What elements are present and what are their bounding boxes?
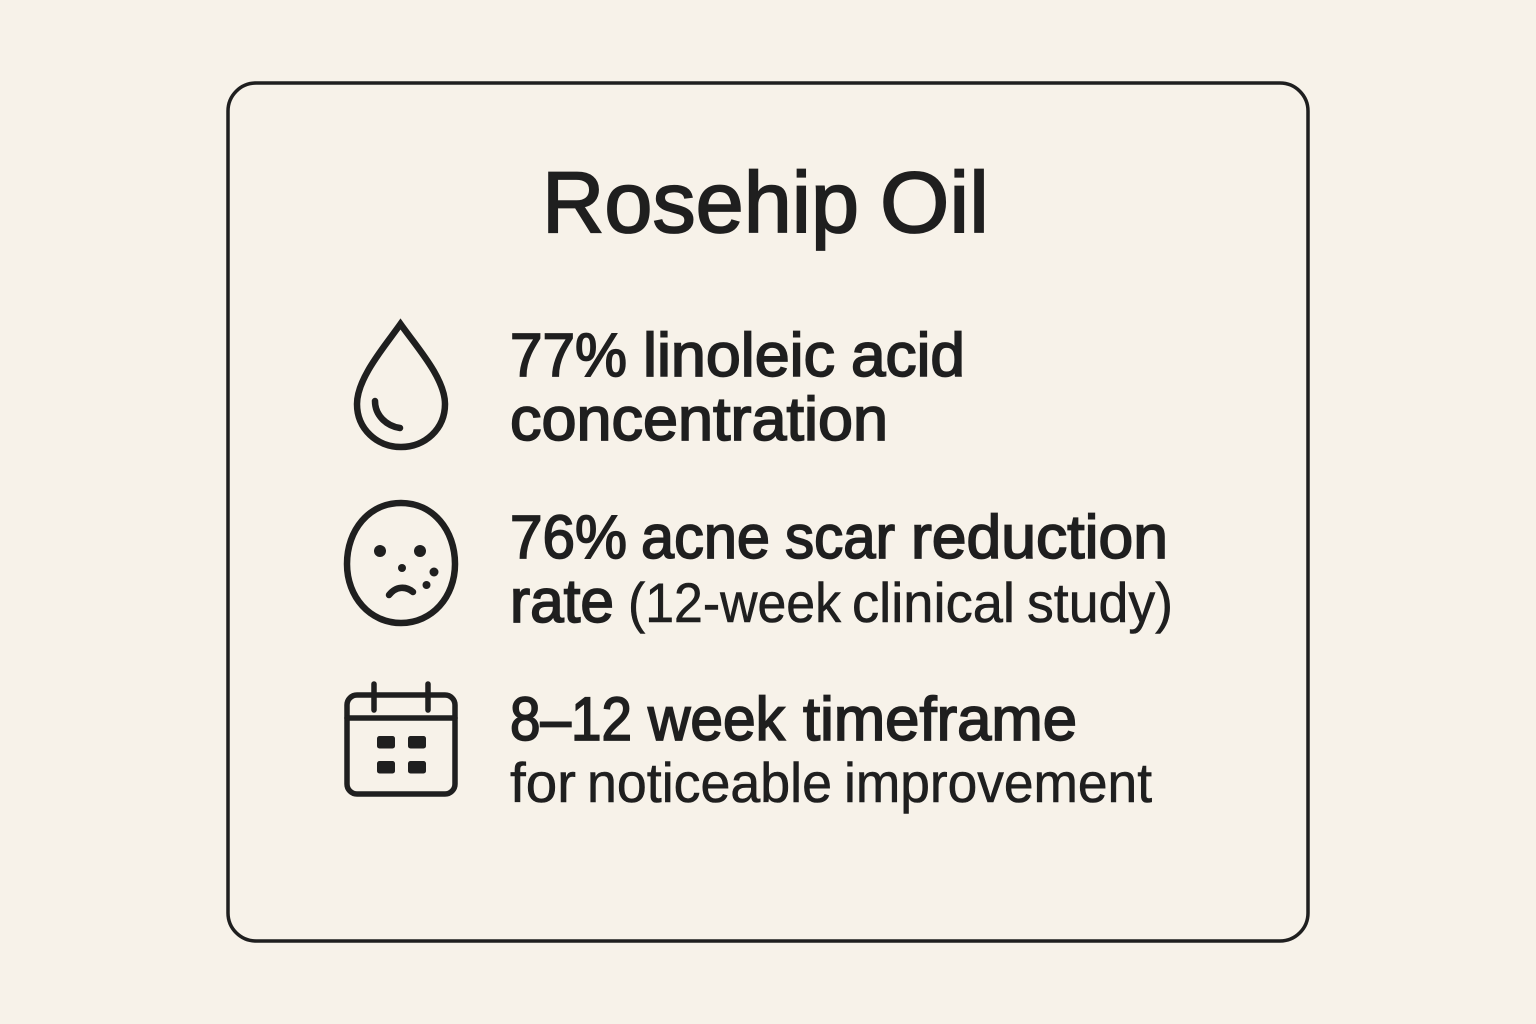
text: linoleic acid stat: acid bbox=[851, 321, 965, 389]
title: Rosehip bbox=[542, 155, 859, 251]
text: acne scar stat: 76% bbox=[510, 503, 627, 571]
text: timeframe stat: timeframe bbox=[803, 685, 1077, 753]
text: acne scar stat: study) bbox=[1027, 571, 1173, 634]
text: acne scar stat: rate bbox=[510, 567, 614, 635]
text: timeframe stat: improvement bbox=[844, 751, 1152, 814]
text: timeframe stat: week bbox=[647, 685, 785, 753]
panel: rosehip oil card bbox=[228, 83, 1308, 941]
text: linoleic acid stat bbox=[510, 321, 965, 453]
title: Oil bbox=[880, 155, 989, 251]
icon: calendar bbox=[347, 684, 455, 794]
text: acne scar stat: clinical bbox=[852, 571, 1015, 634]
icon: face with acne marks bbox=[347, 503, 455, 623]
text: acne scar stat: scar bbox=[785, 503, 895, 571]
text: linoleic acid stat: concentration bbox=[510, 385, 888, 453]
text: timeframe stat: for bbox=[510, 751, 576, 814]
text: timeframe stat: noticeable bbox=[587, 751, 832, 814]
icon: oil drop bbox=[357, 324, 445, 447]
text: timeframe stat: 8–12 bbox=[510, 685, 632, 753]
text: acne scar stat: reduction bbox=[911, 503, 1168, 571]
text: linoleic acid stat: linoleic bbox=[643, 321, 835, 389]
text: timeframe stat bbox=[510, 685, 1152, 814]
text: acne scar stat: (12-week bbox=[628, 571, 842, 634]
text: acne scar stat bbox=[510, 503, 1173, 635]
text: linoleic acid stat: 77% bbox=[510, 321, 627, 389]
text: acne scar stat: acne bbox=[641, 503, 770, 571]
